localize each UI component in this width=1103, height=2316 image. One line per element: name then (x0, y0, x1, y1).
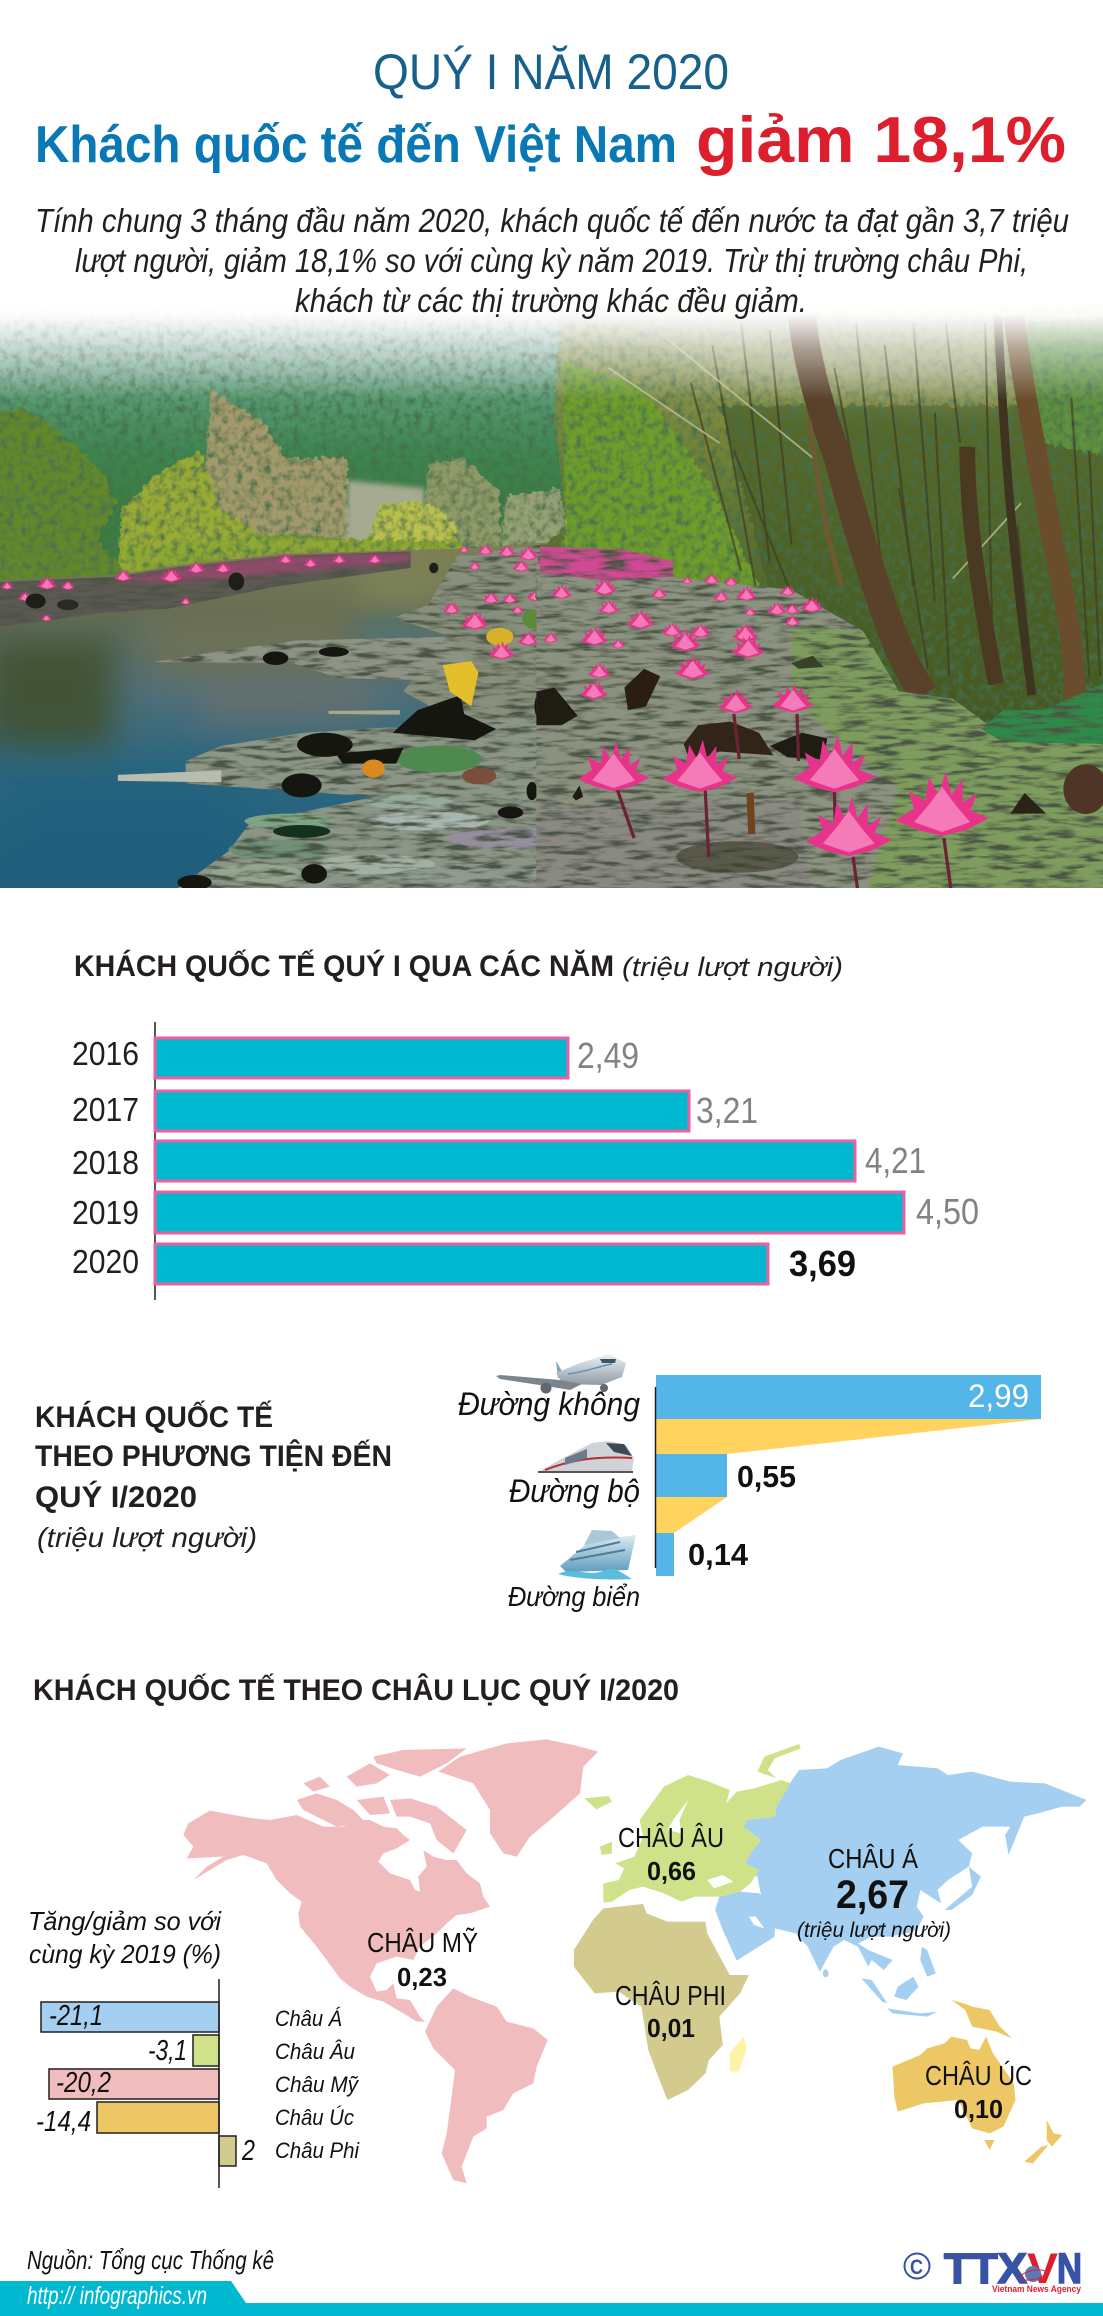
footer url: http:// infographics.vn (27, 2282, 207, 2310)
bar legend: Châu Mỹ (275, 2072, 360, 2097)
icon: train (538, 1441, 634, 1473)
photo: left half, hills and water (0, 292, 585, 902)
bar values: -20,2 (56, 2067, 111, 2099)
funnel bar chart: 0,14 (688, 1537, 749, 1572)
bar values: -3,1 (148, 2035, 187, 2067)
value labels: 4,50 (916, 1191, 979, 1232)
logo: TTXVN: N (1057, 2245, 1082, 2293)
map: eastern continents (574, 1744, 1087, 2163)
bar values (36, 2000, 255, 2167)
label: Africa (615, 1980, 726, 2043)
photo: forest branches (691, 323, 1100, 676)
transport labels: Đường không (458, 1386, 640, 1422)
photo: stems (617, 714, 951, 890)
panel: visitors by year (72, 949, 979, 1300)
year labels: 2020 (72, 1243, 139, 1280)
photo: dark leaves and yellow leaf (177, 609, 562, 890)
heading: visitors by year: (triệu lượt người) (622, 952, 843, 982)
photo: tree trunks (802, 315, 1075, 701)
label: Europe: CHÂU ÂU (618, 1822, 724, 1853)
intro paragraph: khách từ các thị trường khác đều giảm. (295, 282, 807, 319)
map: Asia (715, 1747, 1087, 2017)
title: quarter: QUÝ I NĂM 2020 (373, 44, 729, 100)
label: Asia: CHÂU Á (828, 1843, 918, 1874)
source note: Nguồn: Tổng cục Thống kê (27, 2245, 274, 2275)
photo: hyacinth and seed pod (982, 680, 1103, 814)
heading: by transport: THEO PHƯƠNG TIỆN ĐẾN (35, 1439, 392, 1473)
title block (35, 44, 1066, 176)
chart title: Tăng/giảm so với (28, 1906, 222, 1936)
heading: by transport: (triệu lượt người) (37, 1522, 257, 1553)
bar legend (275, 2006, 360, 2163)
year labels: 2017 (72, 1091, 139, 1128)
label: Africa: CHÂU PHI (615, 1980, 726, 2011)
bar values: -21,1 (49, 2000, 103, 2032)
value labels: 4,21 (865, 1140, 926, 1181)
funnel bar chart (656, 1375, 1041, 1576)
bar legend: Châu Úc (275, 2105, 354, 2130)
bar legend: Châu Âu (275, 2039, 355, 2064)
logo: TTXVN: V (1027, 2245, 1058, 2293)
panel: visitors by transport (35, 1354, 1041, 1612)
map: Europe (584, 1744, 801, 1903)
transport labels: Đường biển (508, 1581, 640, 1612)
bar values: -14,4 (36, 2106, 91, 2138)
logo: TTXVN: Vietnam News Agency (992, 2284, 1081, 2294)
label: America: CHÂU MỸ (367, 1927, 478, 1958)
value labels: 3,69 (789, 1243, 856, 1284)
photo: misty top fade (0, 300, 1103, 400)
logo: TTXVN: TTX (944, 2245, 1027, 2293)
diverging bar chart (41, 1979, 236, 2188)
value labels (577, 1035, 979, 1284)
photo: river water (0, 541, 571, 902)
funnel bar chart: 2,99 (968, 1378, 1029, 1414)
year labels: 2018 (72, 1144, 139, 1181)
bar values: 2 (241, 2135, 255, 2167)
logo: TTXVN (904, 2245, 1082, 2294)
heading: by continent: KHÁCH QUỐC TẾ THEO CHÂU LỤC QUÝ I/2020 (33, 1673, 679, 1707)
label: Europe: 0,66 (647, 1856, 696, 1886)
photo: left bank lily pads (0, 551, 438, 627)
bar legend: Châu Á (275, 2006, 342, 2031)
photo: dark leaves (536, 656, 827, 800)
year labels: 2019 (72, 1194, 139, 1231)
map: Africa (574, 1904, 749, 2100)
value labels: 2,49 (577, 1035, 639, 1076)
chart title (28, 1906, 222, 1969)
heading: by transport: KHÁCH QUỐC TẾ (35, 1400, 273, 1434)
year labels: 2016 (72, 1035, 139, 1072)
map labels (367, 1822, 1032, 2124)
heading: by transport: QUÝ I/2020 (35, 1480, 197, 1514)
photo: central lily pads (118, 541, 571, 890)
footer band (0, 2281, 1103, 2316)
label: Oceania: CHÂU ÚC (925, 2060, 1032, 2091)
label: Oceania: 0,10 (954, 2094, 1003, 2124)
bar chart: yearly visitors (155, 1038, 904, 1284)
heading: visitors by year: KHÁCH QUỐC TẾ QUÝ I QUA CÁC NĂM (74, 949, 614, 983)
icon: airplane (496, 1354, 626, 1394)
label: Europe (618, 1822, 724, 1886)
label: Asia: 2,67 (836, 1873, 909, 1917)
intro paragraph (35, 202, 1069, 319)
photo: lotus stream (0, 292, 1103, 902)
bar legend: Châu Phi (275, 2138, 360, 2163)
photo: right half, forest and lotus field (536, 292, 1103, 902)
map: Americas (183, 1739, 598, 2183)
chart title: cùng kỳ 2019 (%) (29, 1939, 221, 1969)
funnel bar chart: 0,55 (737, 1459, 796, 1494)
photo: left half lotus (442, 544, 540, 660)
icon: cruise ship (558, 1530, 636, 1579)
year labels (72, 1035, 139, 1280)
label: Africa: 0,01 (647, 2013, 695, 2043)
title: headline blue: Khách quốc tế đến Việt Nam (35, 116, 677, 174)
label: Asia (797, 1843, 951, 1942)
photo: right half lotus (543, 573, 989, 856)
label: America (367, 1927, 478, 1992)
label: Oceania (925, 2060, 1032, 2124)
logo: TTXVN: C (910, 2256, 923, 2279)
photo: lotus field pads (536, 546, 1103, 902)
title: headline red: giảm 18,1% (696, 103, 1066, 176)
transport labels: Đường bộ (509, 1473, 640, 1509)
map: Oceania (893, 2000, 1062, 2163)
transport labels (458, 1386, 640, 1612)
panel: change vs 2019 (28, 1906, 360, 2188)
heading: by transport (35, 1400, 392, 1553)
label: America: 0,23 (397, 1962, 447, 1992)
label: Asia: (triệu lượt người) (797, 1919, 951, 1942)
value labels: 3,21 (696, 1090, 758, 1131)
